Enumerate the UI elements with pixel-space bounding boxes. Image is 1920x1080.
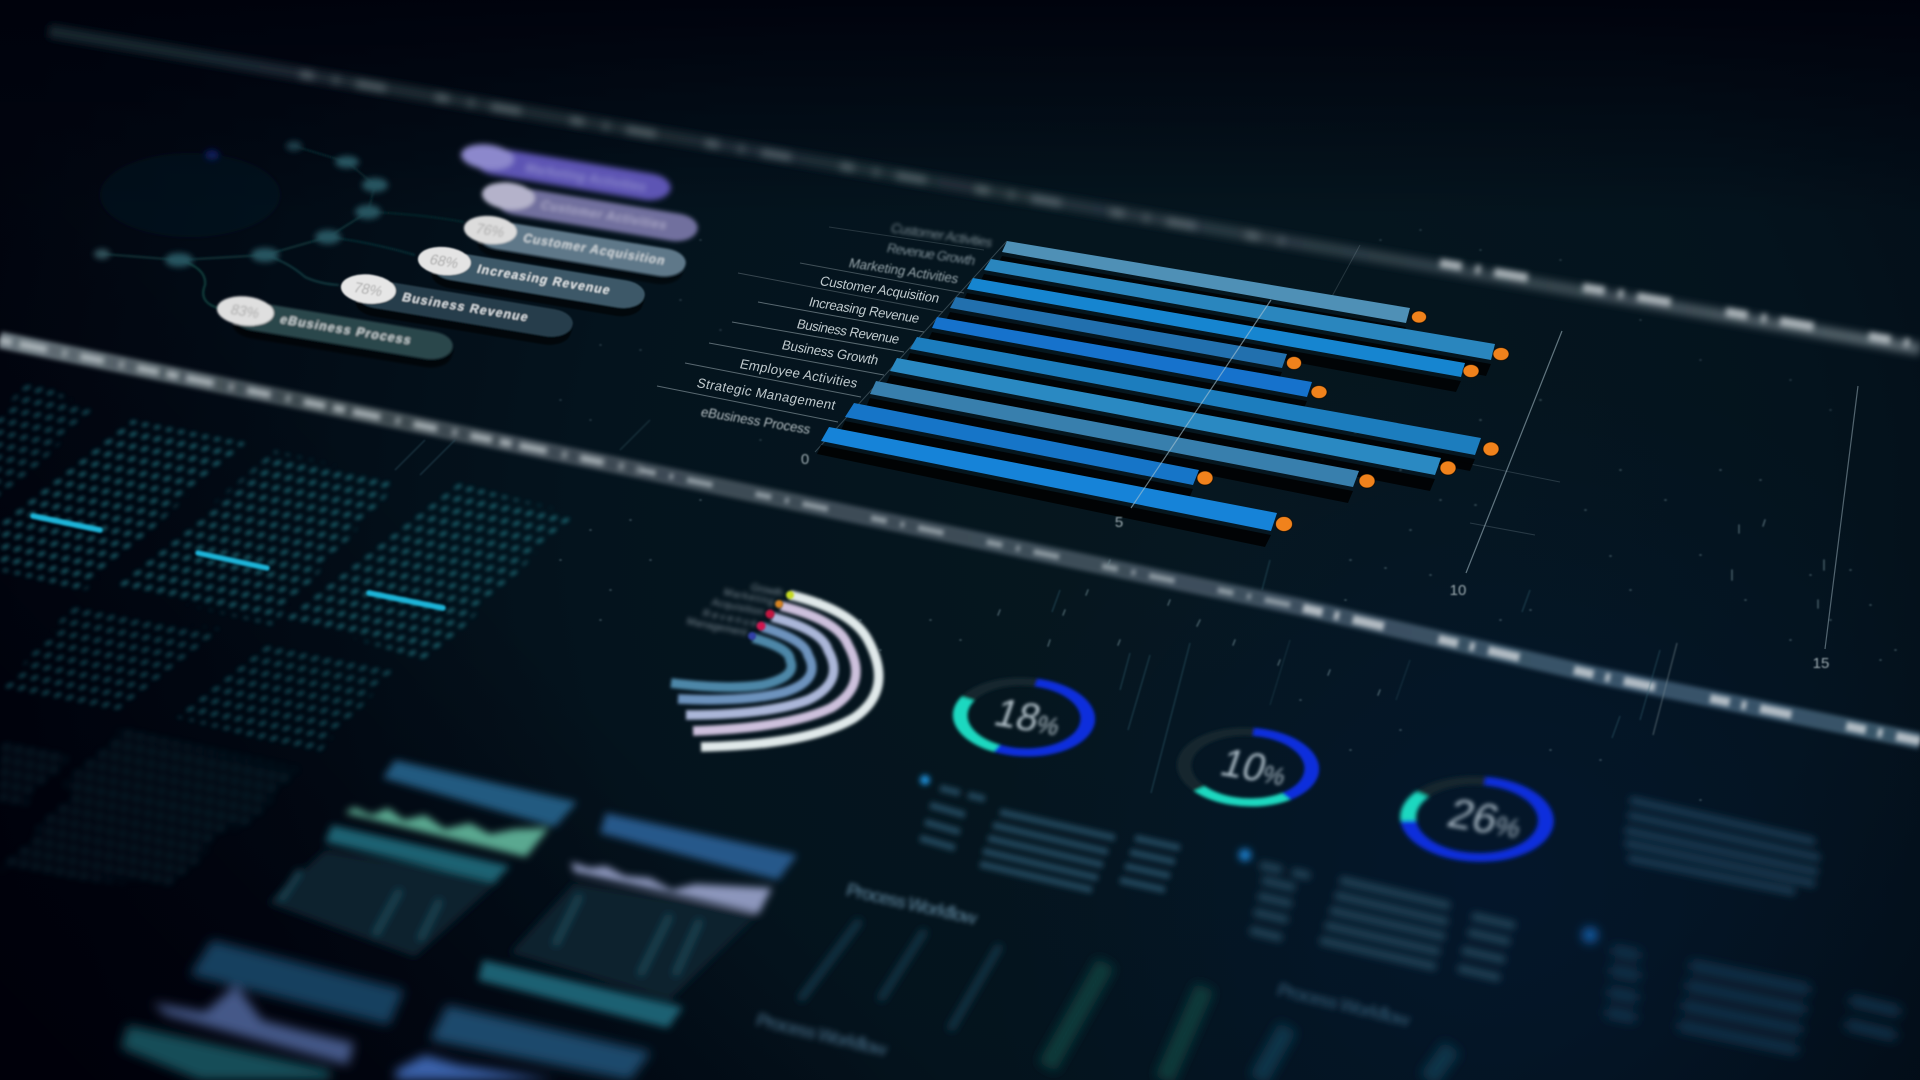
radial bar chart	[671, 582, 879, 747]
donut: 26 percent: 26%	[1442, 789, 1530, 847]
dot panels	[0, 380, 575, 753]
series labels: Marketing	[722, 587, 776, 608]
label: lower labels: Increasing Revenue	[807, 294, 922, 326]
pill: Increasing Revenue: Increasing Revenue	[475, 262, 612, 297]
far dot panels	[0, 730, 300, 887]
workflow column: content	[800, 920, 1000, 1030]
pill: Business Revenue	[333, 271, 579, 348]
series labels: Growth	[749, 582, 785, 599]
green column bars	[1047, 963, 1452, 1080]
data table 3	[1583, 928, 1900, 1050]
label: Revenue Growth: Revenue Growth	[885, 240, 978, 268]
label: Customer Activities: Customer Activities	[889, 220, 995, 250]
pill list	[209, 141, 703, 371]
bar: Business Growth	[886, 358, 1456, 491]
label: eBusiness Process: eBusiness Process	[699, 404, 813, 437]
label: lower labels: Business Revenue	[795, 316, 902, 347]
donut: 10 percent	[1171, 723, 1325, 811]
label: lower labels: Strategic Management	[695, 375, 838, 413]
pill: Marketing Activities	[456, 141, 676, 203]
bar: Customer Acquisition	[946, 297, 1302, 384]
donut: 18 percent: 18%	[989, 691, 1068, 744]
label: lower labels: Business Growth	[780, 337, 880, 368]
bar: Customer Activities	[998, 241, 1426, 337]
axis labels: 15	[1813, 655, 1829, 672]
mini card: lavender area chart	[478, 813, 797, 1028]
label: lower labels: Employee Activities	[738, 356, 860, 391]
pill: Customer Acquisition: Customer Acquisition	[521, 231, 667, 268]
bar: eBusiness Process	[817, 427, 1292, 547]
lower heading: Process Workflow	[754, 1009, 890, 1060]
bar: Marketing Activities	[963, 278, 1479, 392]
mini card: indigo area chart	[121, 940, 404, 1080]
pill: Increasing Revenue: 68%	[427, 252, 461, 272]
concentric arcs	[671, 595, 879, 747]
axis labels: 5	[1115, 514, 1123, 531]
far right text block	[1625, 800, 1820, 892]
leader lines	[657, 227, 984, 422]
chart grid and axis lines	[815, 241, 1858, 649]
bar: Revenue Growth	[980, 259, 1509, 376]
upper horizontal data strip	[49, 31, 1920, 349]
mini card: bottom blue chart	[396, 1005, 651, 1080]
donut: 18 percent	[947, 673, 1101, 761]
pill: Increasing Revenue	[410, 243, 651, 319]
pill: Customer Acquisition: 76%	[473, 221, 507, 241]
axis labels: 10	[1450, 582, 1466, 599]
axis labels	[801, 451, 1829, 672]
dust specks	[560, 230, 1896, 800]
pill: eBusiness Process: eBusiness Process	[278, 312, 413, 347]
pill: Business Revenue: Business Revenue	[400, 290, 530, 324]
bar: Increasing Revenue	[928, 317, 1327, 413]
colored series markers	[748, 591, 794, 640]
lower heading right: Process Workflow	[1275, 979, 1413, 1031]
bar: Employee Activities	[866, 381, 1375, 503]
pill: eBusiness Process: 83%	[228, 302, 262, 322]
pill: Customer Acquisition	[456, 212, 691, 287]
pill: Business Revenue: 78%	[351, 280, 385, 300]
dust and faint streaks	[395, 420, 1677, 793]
donut: 10 percent: 10%	[1215, 741, 1294, 794]
axis labels: 0	[801, 451, 809, 468]
series labels	[685, 582, 785, 639]
pill: Marketing Activities: Marketing Activities	[524, 161, 648, 194]
data table 2	[1239, 849, 1515, 978]
bar: Strategic Management	[841, 403, 1213, 501]
workflow column: heading: Process Workflow	[844, 879, 980, 929]
label: lower labels: Customer Acquisition	[818, 273, 942, 306]
series labels: Management	[685, 616, 748, 639]
label: Marketing Activities: Marketing Activities	[847, 255, 961, 286]
pill: Customer Activities: Customer Activities	[539, 198, 669, 232]
data table 1	[920, 775, 1180, 890]
lower horizontal data strip	[0, 340, 1920, 741]
mini card: green area chart	[268, 760, 577, 957]
donut: 26 percent	[1394, 772, 1560, 866]
series labels: Revenue	[701, 608, 759, 630]
bar chart	[657, 220, 1858, 672]
pill: Customer Activities	[476, 179, 703, 244]
chart category labels	[695, 220, 995, 437]
bar: Business Revenue	[906, 337, 1499, 471]
network connector diagram	[94, 141, 464, 308]
dot matrix panels	[0, 380, 575, 887]
series labels: Acquisition	[710, 597, 766, 618]
value gridline at 5	[1131, 300, 1271, 508]
cyan dashes	[33, 516, 443, 608]
label: lower labels	[695, 273, 942, 413]
pill: eBusiness Process	[209, 292, 460, 371]
